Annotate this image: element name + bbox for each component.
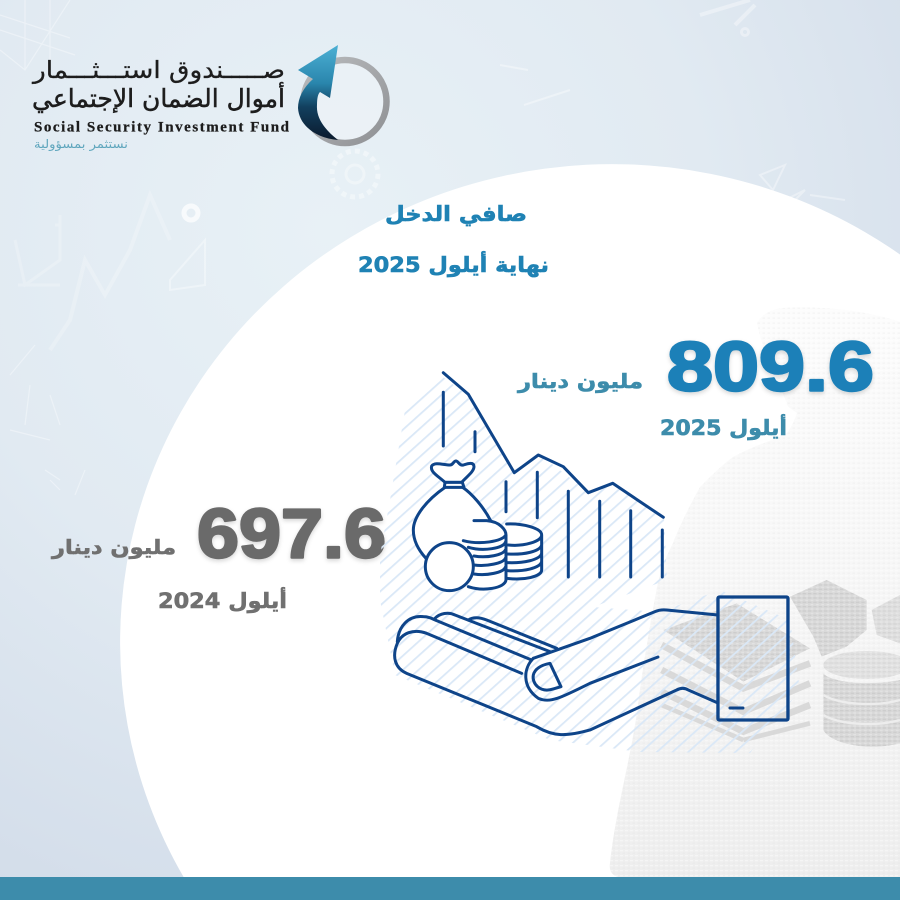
- icon: money bag and coins: [413, 461, 542, 591]
- bag: printed banknote stacks: [662, 580, 900, 747]
- logo: arrow: [298, 45, 338, 140]
- figure: September 2024: [51, 494, 386, 613]
- icon: cuff button: [730, 703, 743, 712]
- 2025 value: 809.6: [667, 328, 874, 406]
- bottom bar: [0, 877, 900, 900]
- icon: chart bars: [443, 392, 662, 577]
- icon: cuff: [718, 597, 788, 720]
- logo: Arabic name line two: أموال الضمان الإجتماعي: [32, 81, 285, 113]
- title: [358, 202, 549, 277]
- logo: [32, 45, 387, 152]
- 2025 unit: مليون دينار: [517, 369, 643, 393]
- logo: ring: [304, 60, 386, 143]
- background money bag: [610, 307, 900, 877]
- 2025 date: أيلول 2025: [660, 413, 787, 440]
- logo: English name: Social Security Investment Fund: [34, 120, 290, 136]
- logo: Arabic name line one: صـــــندوق استـــثـــمار: [32, 56, 285, 84]
- 2024 date: أيلول 2024: [158, 586, 287, 613]
- background decoration: faint charts and gear: [0, 0, 845, 495]
- icon: hatch background: [380, 377, 800, 753]
- 2024 value: 697.6: [197, 494, 386, 572]
- white circle panel: [120, 164, 900, 877]
- central icon: hand holding money with falling chart: [380, 373, 800, 753]
- title line two: نهاية أيلول 2025: [358, 250, 549, 277]
- logo: slogan: نستثمر بمسؤولية: [34, 137, 128, 152]
- icon: falling line chart: [443, 373, 663, 517]
- title line one: صافي الدخل: [385, 202, 527, 226]
- icon: open hand: [395, 597, 788, 735]
- figure: September 2025: [517, 328, 874, 440]
- 2024 unit: مليون دينار: [51, 535, 176, 559]
